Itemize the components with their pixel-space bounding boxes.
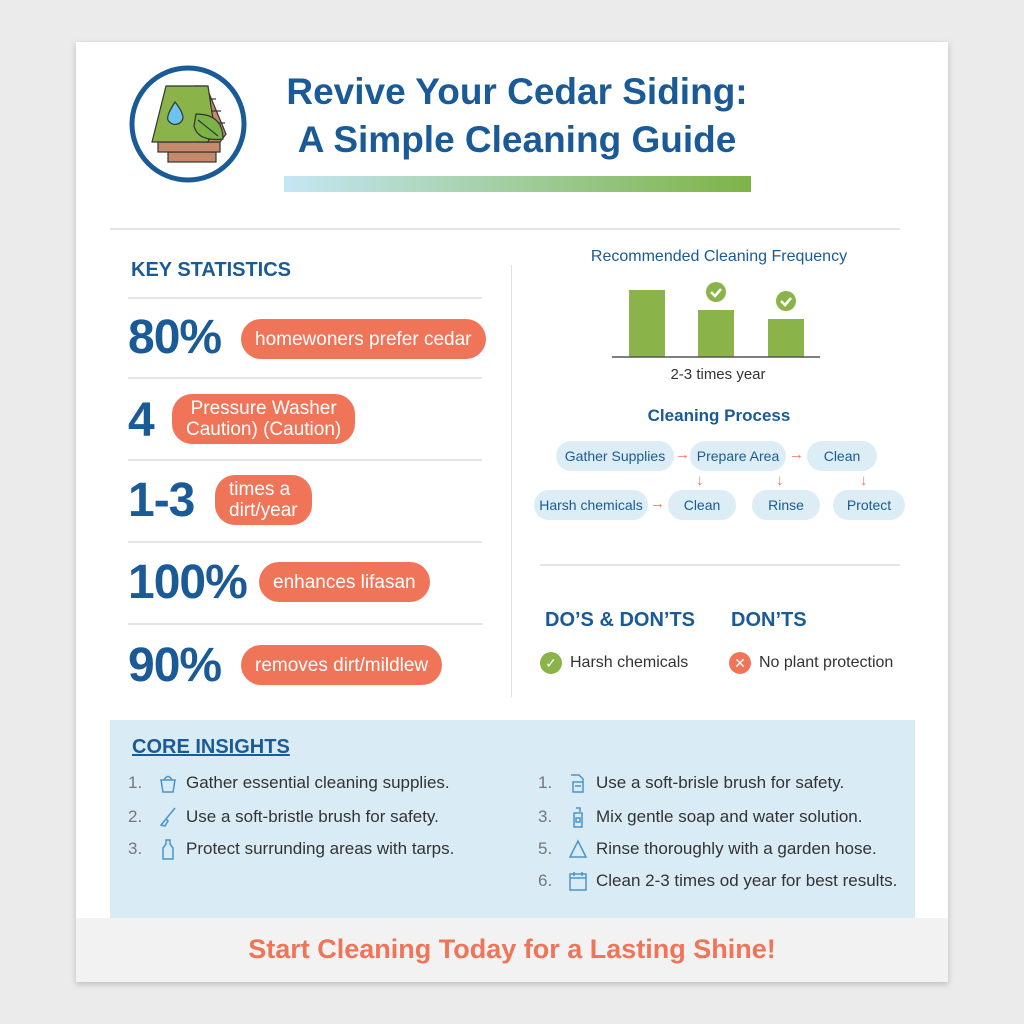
stat 1-3: dirt/year [229,500,298,521]
heading: cleaning frequency: Recommended Cleaning Frequency [591,248,847,265]
stat 4 [128,394,355,447]
panel: do's and don'ts: DON’TS [731,609,807,631]
stat 90%: removes dirt/mildlew [255,654,428,676]
stat 100%: enhances lifasan [273,572,416,592]
heading: cleaning process: Cleaning Process [648,406,790,425]
bar chart: 2-3 times year [670,366,766,383]
panel: core insights: 2. [128,807,142,826]
stat 4: Caution) (Caution) [186,419,341,440]
bar chart [612,282,820,383]
heading: key statistics: KEY STATISTICS [131,259,291,281]
stat 1-3: 1-3 [128,474,194,527]
panel: do's and don'ts: DO’S & DON’TS [545,609,695,631]
flow chart: cleaning process: Gather Supplies [565,448,665,464]
flow chart: cleaning process: → [789,446,804,463]
flow chart: cleaning process: Rinse [768,497,804,513]
panel: core insights: CORE INSIGHTS [132,736,290,758]
panel: core insights [110,720,915,918]
stat 1-3: times a [229,479,290,500]
panel: core insights: Protect surrunding areas with tarps. [186,839,454,858]
panel: do's and don'ts [540,609,893,674]
flow chart: cleaning process [534,441,905,520]
panel: core insights: Mix gentle soap and water solution. [596,807,862,826]
stat 100%: 100% [128,556,247,609]
title: A Simple Cleaning Guide [298,119,736,160]
panel: do's and don'ts: No plant protection [759,654,893,671]
panel: key statistics [128,259,486,692]
panel: core insights: Use a soft-brisle brush for safety. [596,773,844,792]
flow chart: cleaning process: Clean [824,448,860,464]
panel: do's and don'ts: ✓ [545,655,557,671]
flow chart: cleaning process: Harsh chemicals [539,497,643,513]
panel: do's and don'ts: ✕ [734,655,746,671]
stat 80% [128,311,486,364]
title underline gradient [284,176,751,192]
panel: do's and don'ts: Harsh chemicals [570,654,688,671]
flow chart: cleaning process: ↓ [776,472,784,489]
stat 4: 4 [128,394,154,447]
stat 80%: homewoners prefer cedar [255,328,472,350]
panel: core insights: 5. [538,839,552,858]
flow chart: cleaning process: Clean [684,497,720,513]
panel: core insights: Clean 2-3 times od year for best results. [596,871,897,890]
stat 80%: 80% [128,311,221,364]
flow chart: cleaning process: Protect [847,497,891,513]
stat 90% [128,639,442,692]
footer banner: Start Cleaning Today for a Lasting Shine! [248,934,776,964]
panel: core insights: Rinse thoroughly with a garden hose. [596,839,877,858]
flow chart: cleaning process: → [675,446,690,463]
panel: core insights: Use a soft-bristle brush for safety. [186,807,439,826]
flow chart: cleaning process: ↓ [696,472,704,489]
stat 4: Pressure Washer [191,398,337,419]
stat 90%: 90% [128,639,221,692]
stat 1-3 [128,474,312,527]
panel: core insights: 6. [538,871,552,890]
flow chart: cleaning process: Prepare Area [697,448,779,464]
panel: core insights: 1. [128,773,142,792]
title: Revive Your Cedar Siding: [286,71,748,112]
flow chart: cleaning process: ↓ [860,472,868,489]
panel: core insights: Gather essential cleaning supplies. [186,773,450,792]
icon: cedar siding logo [130,66,246,182]
panel: core insights: 1. [538,773,552,792]
panel: core insights: 3. [128,839,142,858]
panel: core insights: 3. [538,807,552,826]
footer banner [76,918,948,982]
title [286,71,748,160]
stat 100% [128,556,430,609]
flow chart: cleaning process: → [650,495,665,512]
